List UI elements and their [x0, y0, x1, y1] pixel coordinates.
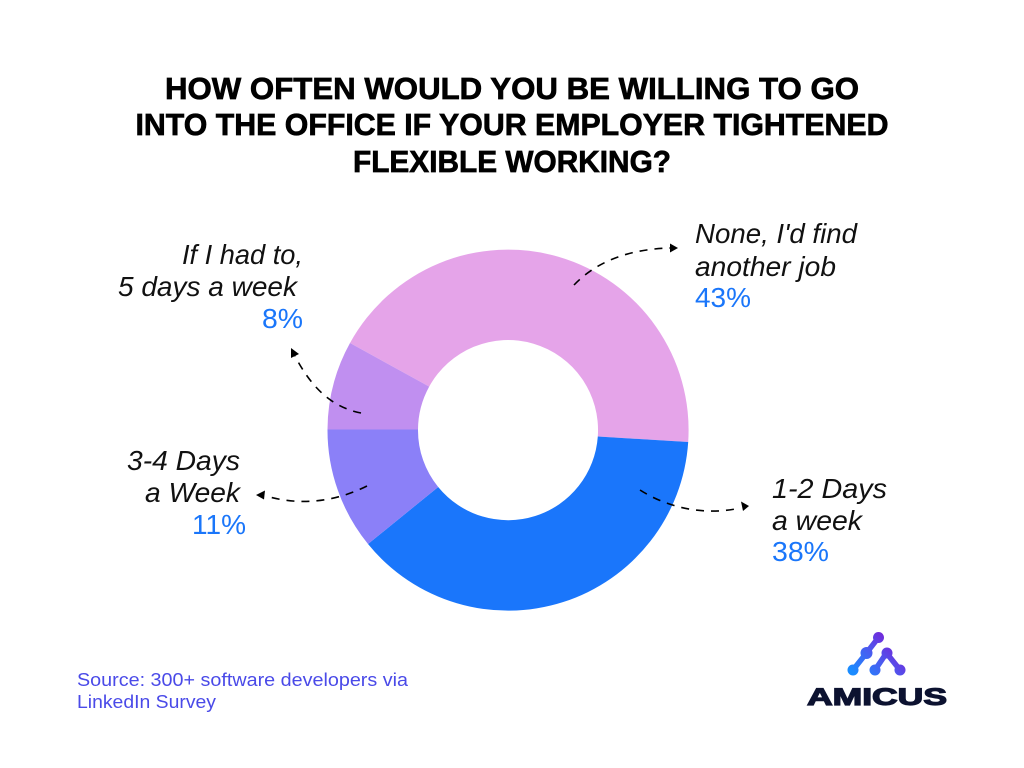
arrow: none: [574, 244, 678, 285]
logo: Amicus: [807, 632, 947, 711]
arrow: 5 days: [291, 348, 361, 413]
label: 1-2 days a week: a week: [772, 505, 863, 536]
arrow: 1-2 days: [640, 490, 749, 511]
source note: LinkedIn Survey: [77, 692, 216, 712]
label: if I had to, 5 days a week: 8%: [262, 303, 303, 334]
source note: Source: 300+ software developers via: [77, 670, 409, 690]
segment: 1-2 days, 38%: [368, 436, 688, 611]
label: 3-4 days a week: 3-4 Days: [127, 445, 240, 476]
arrow: 3-4 days: [256, 486, 367, 501]
label: 3-4 days a week: 11%: [192, 509, 246, 540]
label: none, I'd find another job: another job: [695, 251, 836, 282]
label: if I had to, 5 days a week: 5 days a week: [118, 271, 298, 302]
label: none, I'd find another job: [695, 218, 859, 313]
segment: 5 days, 8%: [328, 343, 429, 430]
logo mark: [848, 632, 906, 676]
source note: [77, 670, 409, 712]
label: 3-4 days a week: a Week: [145, 477, 241, 508]
segment: 3-4 days, 11%: [327, 430, 438, 544]
label: none, I'd find another job: 43%: [695, 282, 751, 313]
label: 1-2 days a week: 1-2 Days: [772, 473, 887, 504]
label: 3-4 days a week: [127, 445, 246, 540]
title: [136, 71, 888, 179]
label: if I had to, 5 days a week: If I had to,: [182, 239, 303, 270]
logo wordmark: AMICUS: [807, 684, 947, 711]
label: if I had to, 5 days a week: [118, 239, 303, 334]
label: none, I'd find another job: None, I'd find: [695, 218, 859, 249]
label: 1-2 days a week: [772, 473, 887, 567]
title: INTO THE OFFICE IF YOUR EMPLOYER TIGHTENED: [136, 107, 888, 142]
title: HOW OFTEN WOULD YOU BE WILLING TO GO: [165, 71, 859, 106]
donut chart: [327, 250, 689, 611]
title: FLEXIBLE WORKING?: [353, 144, 671, 179]
label: 1-2 days a week: 38%: [772, 536, 829, 567]
segment: none, 43%: [350, 250, 689, 442]
